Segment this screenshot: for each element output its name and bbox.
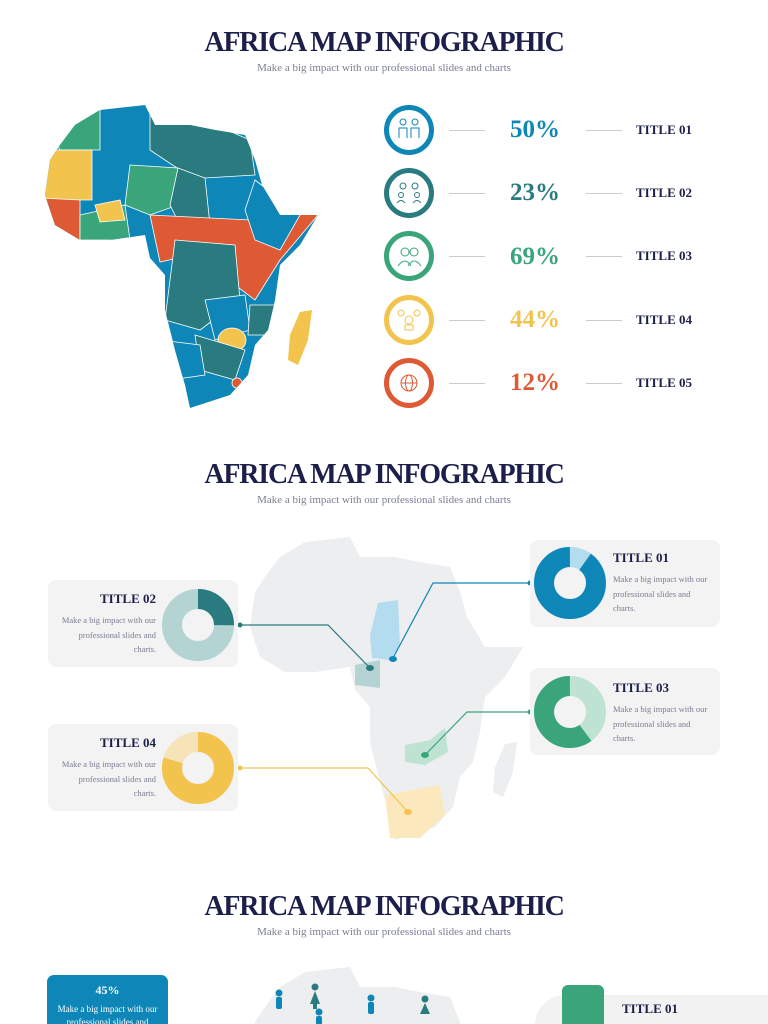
title 2: AFRICA MAP INFOGRAPHIC — [204, 459, 564, 490]
title 03: TITLE 03 — [636, 248, 692, 263]
stat 23%: 23% — [510, 179, 560, 206]
subtitle 3: Make a big impact with our professional slides and charts — [257, 926, 511, 938]
card: title 02: Make a big impact with our professional slides and charts. — [62, 615, 156, 654]
map 3 with people icons — [254, 967, 460, 1024]
card: title 02: TITLE 02 — [100, 591, 156, 606]
right panel title 01: TITLE 01 — [622, 1001, 678, 1016]
blue stat box: 45% — [96, 983, 120, 997]
card: title 02 — [48, 580, 238, 667]
right panel title 01 — [535, 985, 768, 1024]
icon ring 1 — [384, 105, 434, 155]
map: grey Africa with highlighted countries — [238, 537, 530, 840]
title 1: AFRICA MAP INFOGRAPHIC — [204, 27, 564, 58]
stat 12%: 12% — [510, 369, 560, 396]
title 01: TITLE 01 — [636, 122, 692, 137]
title 02: TITLE 02 — [636, 185, 692, 200]
stat 69%: 69% — [510, 243, 560, 270]
stat 50%: 50% — [510, 116, 560, 143]
card: title 03: TITLE 03 — [613, 680, 669, 695]
title 05: TITLE 05 — [636, 375, 692, 390]
title 04: TITLE 04 — [636, 312, 692, 327]
icon ring 5 — [384, 358, 434, 408]
card: title 03 — [530, 668, 720, 755]
card: title 01: TITLE 01 — [613, 550, 669, 565]
card: title 04: TITLE 04 — [100, 735, 156, 750]
card: title 01 — [530, 540, 720, 627]
card: title 01: Make a big impact with our professional slides and charts. — [613, 574, 707, 613]
card: title 03: Make a big impact with our professional slides and charts. — [613, 704, 707, 743]
title 3: AFRICA MAP INFOGRAPHIC — [204, 891, 564, 922]
stat 44%: 44% — [510, 306, 560, 333]
card: title 04: Make a big impact with our professional slides and charts. — [62, 759, 156, 798]
icon ring 2 — [384, 168, 434, 218]
icon ring 4 — [384, 295, 434, 345]
subtitle 1: Make a big impact with our professional slides and charts — [257, 62, 511, 74]
subtitle 2: Make a big impact with our professional slides and charts — [257, 494, 511, 506]
blue stat box — [47, 975, 168, 1024]
map: colored Africa — [45, 105, 318, 408]
icon ring 3 — [384, 231, 434, 281]
stats list icons — [384, 105, 434, 408]
card: title 04 — [48, 724, 238, 811]
